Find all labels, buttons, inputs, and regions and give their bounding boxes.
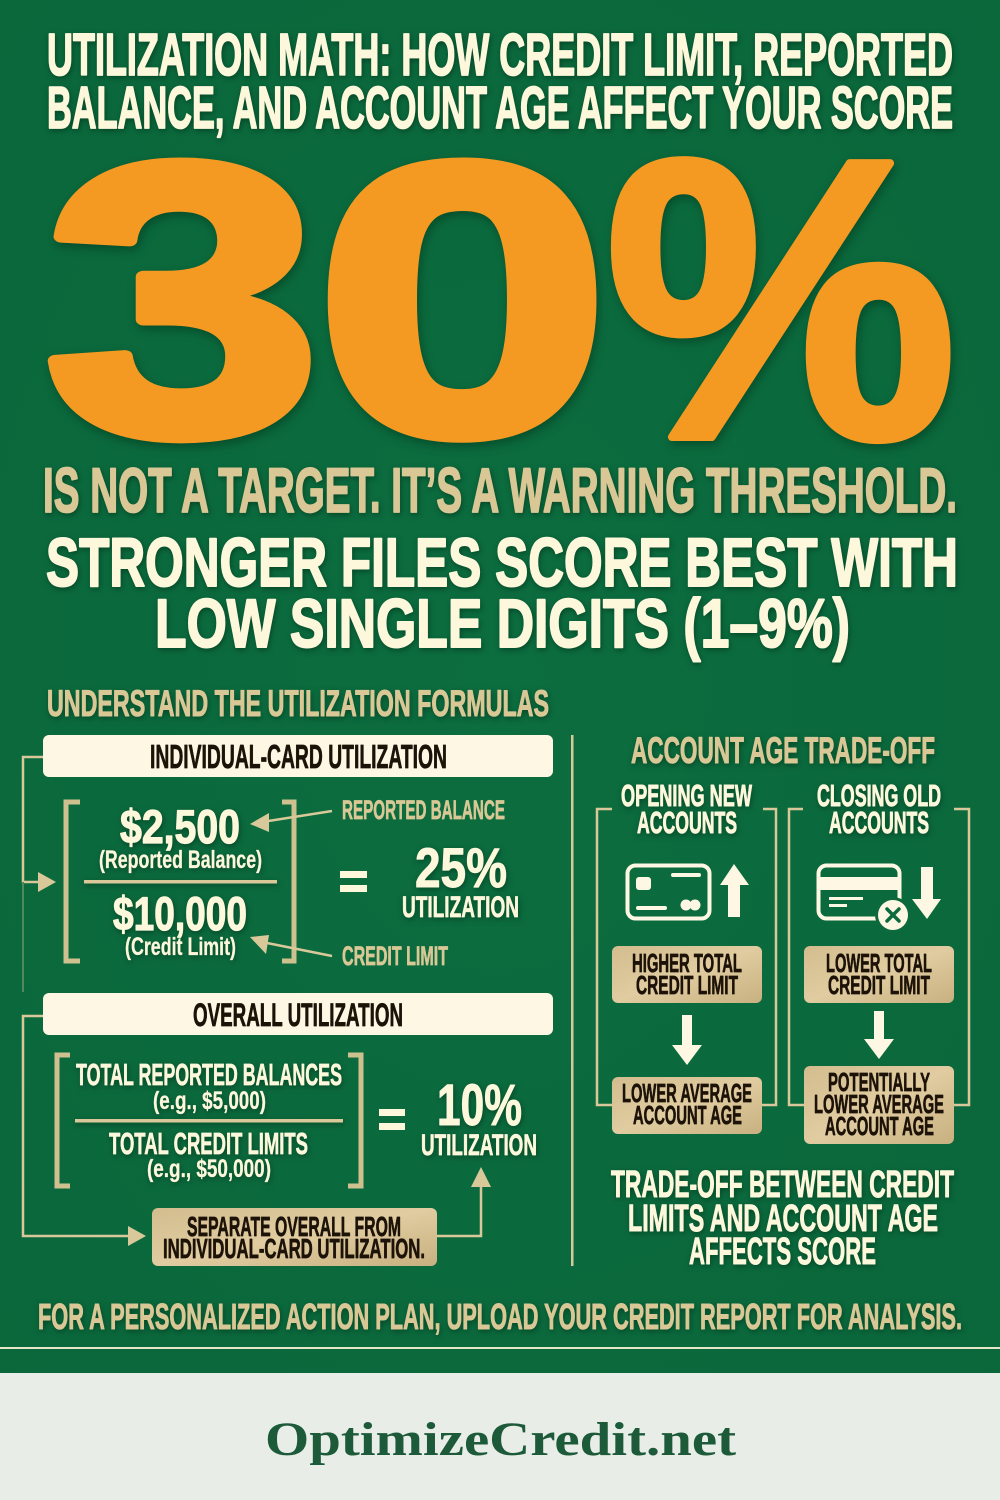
arrow: down (672, 1015, 702, 1065)
box: lower total credit limit (804, 946, 954, 1003)
panel: overall utilization (23, 993, 553, 1266)
frame (597, 809, 776, 1105)
footer band (0, 1373, 1000, 1500)
box: higher total credit limit: HIGHER TOTAL (632, 948, 742, 978)
box: lower average account age (612, 1077, 762, 1134)
column heading (621, 778, 752, 840)
column: closing old accounts (789, 778, 969, 1144)
overall fraction: TOTAL REPORTED BALANCES (76, 1057, 342, 1092)
result: 10%: 10% (437, 1073, 522, 1138)
formula brackets (66, 802, 294, 961)
connector arrow: individual card (23, 757, 56, 992)
connector arrow: overall (23, 1016, 146, 1246)
big statistic: 30%: % (605, 78, 957, 522)
arrow: down (864, 1011, 894, 1059)
big statistic: 30%: 0 (315, 84, 610, 515)
box: lower total credit limit: CREDIT LIMIT (828, 970, 930, 1000)
column: opening new accounts (597, 778, 776, 1134)
callout: separate overall: SEPARATE OVERALL FROM (187, 1211, 401, 1242)
arrow: down (912, 867, 941, 919)
heading: formulas: UNDERSTAND THE UTILIZATION FORMULAS (47, 683, 549, 724)
subheading: low single digits (46, 524, 958, 662)
big statistic: 30% (44, 78, 957, 522)
callout: separate overall: INDIVIDUAL-CARD UTILIZATION. (163, 1233, 425, 1264)
big statistic: 30%: 3 (44, 84, 321, 515)
equals sign (379, 1109, 405, 1130)
result: 25% (402, 836, 519, 924)
column heading (817, 778, 941, 840)
icon: closed credit card (818, 866, 911, 933)
column heading: OPENING NEW (621, 778, 752, 813)
box: potentially lower average account age (804, 1066, 954, 1144)
header pill: overall: OVERALL UTILIZATION (193, 997, 403, 1033)
result: 10%: UTILIZATION (421, 1129, 537, 1162)
header pill: individual-card: INDIVIDUAL-CARD UTILIZATION (150, 738, 447, 775)
callout: credit limit (250, 935, 448, 971)
fraction: (Reported Balance) (99, 846, 262, 874)
icon: new credit card (628, 866, 710, 918)
text block: trade-off summary (611, 1164, 954, 1273)
callout: credit limit: CREDIT LIMIT (342, 941, 448, 971)
column heading: ACCOUNTS (637, 805, 737, 840)
overall fraction: (e.g., $50,000) (147, 1155, 271, 1183)
box: higher total credit limit: CREDIT LIMIT (636, 970, 738, 1000)
callout: reported balance: REPORTED BALANCE (342, 795, 505, 825)
fraction (84, 800, 277, 961)
panel: individual-card utilization (23, 735, 553, 992)
result: 25%: UTILIZATION (402, 891, 519, 924)
title (47, 22, 953, 141)
overall fraction (75, 1057, 343, 1183)
overall fraction: (e.g., $5,000) (153, 1087, 266, 1115)
header pill: individual-card (43, 735, 553, 777)
header pill: overall (43, 993, 553, 1035)
box: lower average account age: LOWER AVERAGE (622, 1078, 752, 1108)
result: 25%: 25% (415, 836, 507, 899)
result: 10% (421, 1073, 537, 1162)
overall brackets (57, 1055, 361, 1186)
callout: reported balance (250, 795, 505, 832)
box: higher total credit limit (612, 946, 762, 1003)
arrow: up (720, 864, 749, 917)
fraction: $2,500 (120, 800, 240, 853)
footer band: OptimizeCredit.net (265, 1413, 736, 1466)
overall fraction: TOTAL CREDIT LIMITS (109, 1126, 308, 1161)
equals sign (340, 871, 367, 892)
column heading: ACCOUNTS (829, 805, 929, 840)
callout: separate overall (152, 1208, 437, 1266)
panel: account age trade-off (597, 730, 969, 1273)
box: lower average account age: ACCOUNT AGE (633, 1100, 742, 1130)
frame (789, 809, 969, 1105)
connector arrow: to result (437, 1167, 491, 1236)
fraction: (Credit Limit) (125, 933, 236, 961)
fraction: $10,000 (113, 887, 247, 940)
